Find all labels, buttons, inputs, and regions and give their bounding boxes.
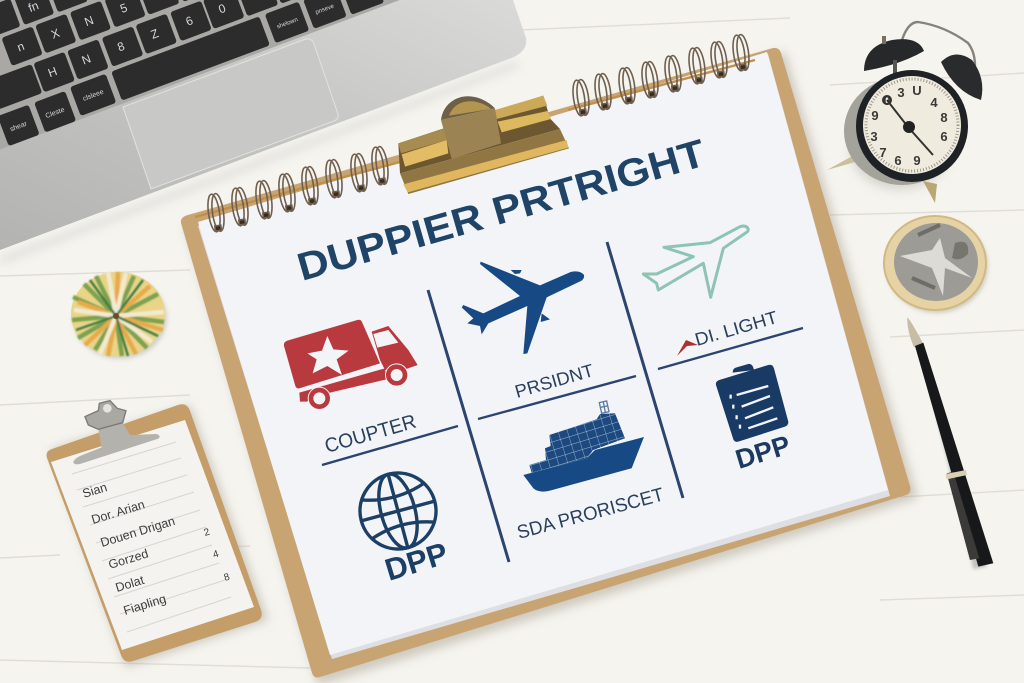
truck wheels	[385, 363, 408, 387]
truck cargo box	[284, 320, 380, 388]
label: sea prospect: SDA PRORISCET	[515, 484, 667, 544]
pen	[907, 317, 993, 569]
notepad sheet	[198, 52, 888, 655]
clip base strip	[400, 129, 569, 194]
trackpad	[123, 39, 338, 189]
clock bells	[864, 39, 924, 71]
clipboard handwritten list	[81, 480, 232, 618]
clipboard handwritten list: Dolat	[114, 573, 146, 595]
clock body	[844, 77, 960, 185]
clipboard handwritten list: Dor. Arian	[90, 497, 146, 527]
label: air freight: DI. LIGHT	[693, 307, 780, 350]
clock numerals: 0	[883, 93, 891, 108]
gold binder clip	[398, 96, 569, 194]
label: president: PRSIDNT	[513, 360, 596, 402]
small clipboard paper	[51, 420, 254, 650]
key legends: 0	[217, 1, 228, 16]
clock numerals: 3	[870, 129, 878, 144]
red chevron mark	[677, 340, 698, 356]
label: courier: COUPTER	[322, 411, 419, 458]
ship funnel	[599, 401, 609, 413]
ball stripes	[72, 272, 164, 356]
clip barrel	[398, 96, 560, 173]
key legends: H	[46, 64, 59, 80]
keyboard	[0, 0, 400, 152]
small clipboard board	[47, 404, 262, 662]
label: DPP under checklist: DPP	[732, 430, 794, 475]
clock numerals: 6	[940, 129, 948, 144]
key legends: X	[49, 26, 62, 42]
clipboard handwritten list: 8	[223, 572, 232, 584]
clock numerals: 9	[871, 108, 879, 123]
clock numerals: 6	[894, 153, 902, 168]
clock numerals: U	[912, 83, 922, 98]
clock numerals	[870, 83, 948, 168]
key legends: N	[80, 51, 93, 68]
sheet title: DUPPIER PRTRIGHT	[293, 132, 710, 290]
binding wire	[195, 60, 755, 217]
compass coin	[884, 216, 988, 313]
clock numerals: 4	[930, 95, 938, 110]
clipboard handwritten list: Fiapling	[122, 592, 168, 618]
truck star	[307, 336, 349, 375]
key legends: 5	[118, 0, 130, 16]
key legends: shear	[9, 120, 29, 133]
key legends: Z	[149, 26, 161, 42]
key legends: N	[83, 13, 96, 29]
alarm clock	[827, 22, 982, 203]
clock numerals: 7	[879, 145, 887, 160]
clock feet	[827, 153, 862, 170]
clipboard handwritten list: 4	[212, 549, 221, 561]
icon: checklist clipboard	[716, 364, 788, 442]
truck cab	[372, 326, 418, 370]
ship hull	[523, 437, 644, 492]
clipboard handwritten list: 2	[203, 527, 212, 539]
key legends: shelown	[276, 17, 299, 30]
clock handle	[902, 22, 975, 66]
ruled lines	[72, 442, 231, 632]
clock hands	[887, 100, 933, 155]
icon: container ship	[523, 401, 644, 492]
icon: blue airplane	[462, 262, 584, 354]
key legends: 6	[184, 13, 195, 29]
clock numerals: 9	[913, 153, 921, 168]
laptop	[0, 0, 526, 264]
key legends: pnseve	[315, 3, 336, 16]
grid rules	[322, 242, 803, 562]
key legends: Cleste	[45, 107, 66, 120]
clip hardware	[73, 401, 160, 464]
clock face	[863, 76, 961, 174]
label: air freight	[677, 307, 780, 356]
clipboard handwritten list: Douen Drigan	[99, 514, 177, 550]
key legends: 8	[115, 39, 127, 54]
key legends: n	[15, 39, 26, 54]
icon: globe	[351, 464, 445, 558]
label: DPP under globe: DPP	[381, 536, 452, 588]
icon: outlined teal airplane	[643, 226, 748, 297]
clip centre tab	[441, 96, 495, 120]
truck chassis	[299, 368, 387, 402]
spiral rings	[206, 34, 751, 233]
clipboard handwritten list: Sian	[81, 480, 109, 501]
paper stack	[198, 54, 890, 659]
clock numerals: 3	[897, 85, 905, 100]
icon: red delivery truck	[284, 320, 418, 410]
key legends: clsleee	[82, 89, 105, 103]
large clipboard	[181, 34, 918, 683]
clipboard handwritten list: Gorzed	[107, 546, 150, 572]
clock ring	[856, 70, 968, 182]
large clipboard board	[181, 48, 910, 678]
key legends	[0, 0, 337, 133]
ship containers	[529, 413, 625, 473]
laptop body	[0, 0, 526, 250]
small clipboard	[47, 401, 268, 667]
clock numerals: 8	[940, 110, 948, 125]
decorative striped ball	[71, 272, 167, 359]
